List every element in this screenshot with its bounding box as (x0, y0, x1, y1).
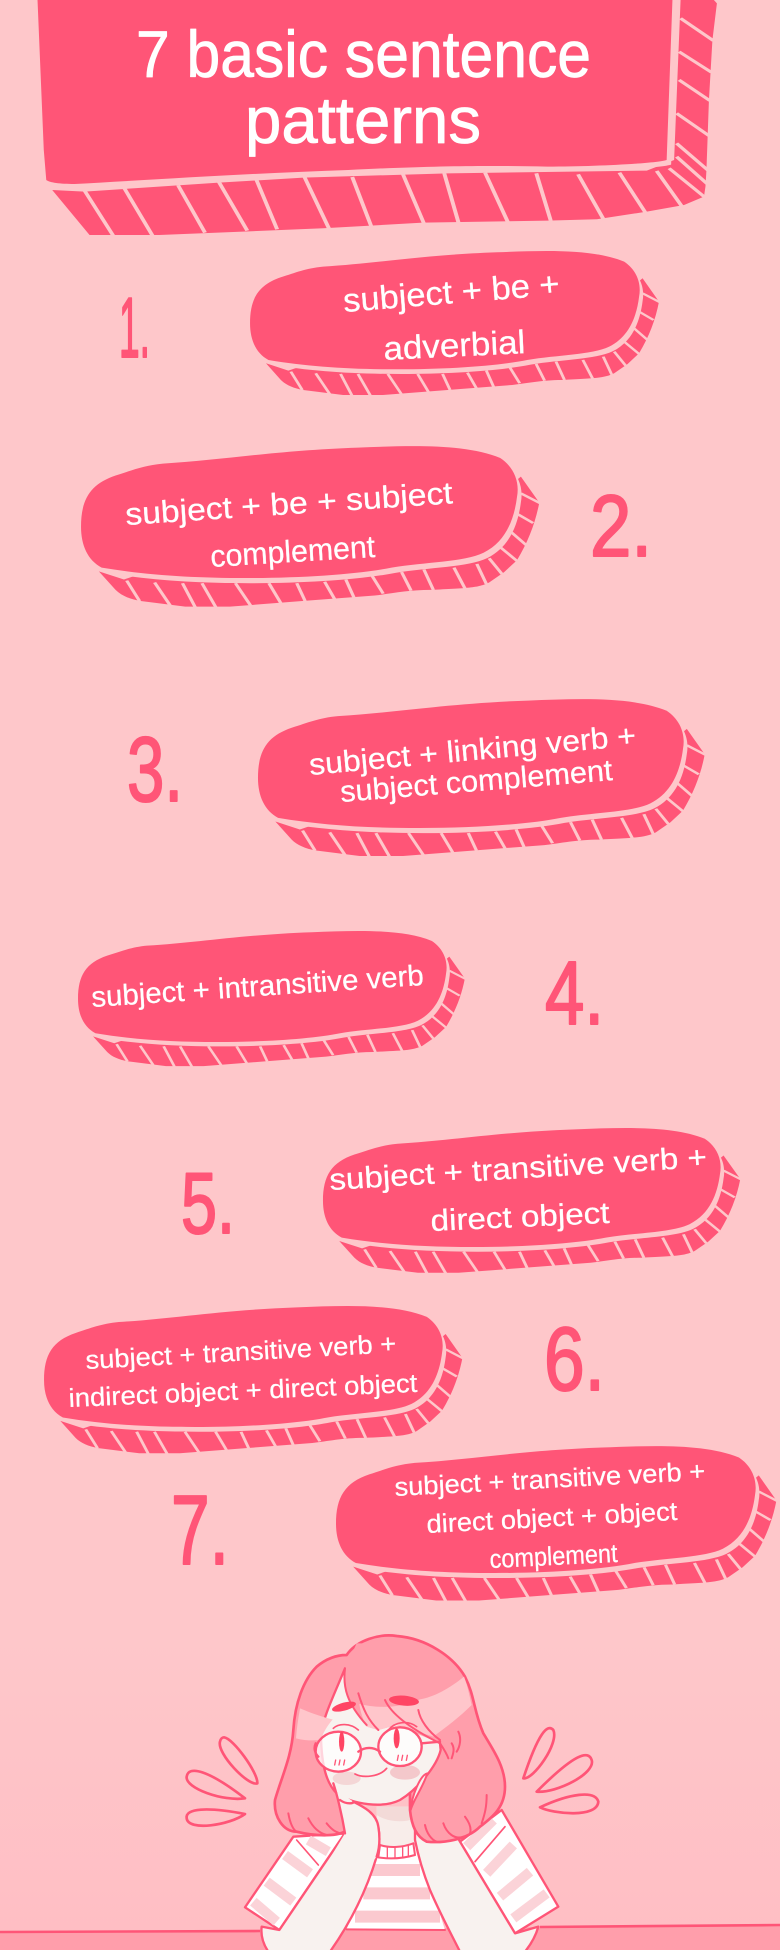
icon: left emphasis marks (187, 1737, 257, 1826)
pattern 7 pill: complement (489, 1538, 619, 1574)
hair highlights (296, 1677, 472, 1740)
pattern 1 pill: subject + be + (342, 265, 561, 319)
pattern 2 pill: subject + be + subject (124, 475, 454, 532)
hair ends (288, 1795, 487, 1842)
pattern 6 pill (44, 1306, 463, 1454)
number 4: 4. (545, 944, 604, 1044)
glasses and eyes (315, 1723, 440, 1776)
pattern 5 pill: subject + transitive verb + (328, 1141, 708, 1197)
title banner (37, 0, 717, 236)
pattern 7 pill: direct object + object (426, 1496, 679, 1539)
face (321, 1668, 441, 1805)
bangs outline (344, 1668, 460, 1758)
title text: 7 basic sentence (136, 17, 591, 91)
title text (136, 17, 591, 157)
bangs (344, 1643, 470, 1743)
eyebrows (331, 1694, 419, 1714)
text: 1. (119, 281, 150, 376)
icon: right emphasis marks (523, 1728, 598, 1813)
right hand (411, 1773, 427, 1810)
table edge (0, 1925, 780, 1950)
right sleeve (460, 1810, 558, 1933)
pattern 4 pill: subject + intransitive verb (90, 960, 425, 1014)
shirt body (347, 1807, 445, 1930)
hair (275, 1635, 505, 1842)
arms (261, 1817, 538, 1950)
number 2: 2. (590, 478, 652, 575)
pattern 5 pill: direct object (430, 1197, 611, 1238)
pattern 7 pill (336, 1446, 778, 1601)
illustration: girl resting chin on hands (187, 1635, 598, 1950)
pattern 2 pill (81, 446, 540, 607)
pattern 1 pill (250, 251, 660, 396)
pattern 6 pill: indirect object + direct object (68, 1368, 419, 1413)
number 3: 3. (127, 719, 183, 821)
pattern 3 pill: subject + linking verb + (308, 719, 637, 782)
number 5: 5. (181, 1156, 235, 1252)
pattern 4 pill (78, 931, 466, 1067)
pattern 6 pill: subject + transitive verb + (85, 1328, 397, 1375)
pattern 5 pill (323, 1128, 741, 1273)
title text: patterns (245, 83, 481, 157)
number 6: 6. (544, 1310, 605, 1410)
left hand (307, 1783, 379, 1897)
left sleeve (245, 1833, 345, 1930)
pattern 1 pill: adverbial (383, 323, 526, 367)
pattern 3 pill: subject complement (339, 754, 614, 809)
number 7: 7. (171, 1475, 229, 1585)
pattern 2 pill: complement (209, 529, 376, 574)
pattern 7 pill: subject + transitive verb + (394, 1456, 706, 1502)
pattern 3 pill (258, 699, 706, 857)
